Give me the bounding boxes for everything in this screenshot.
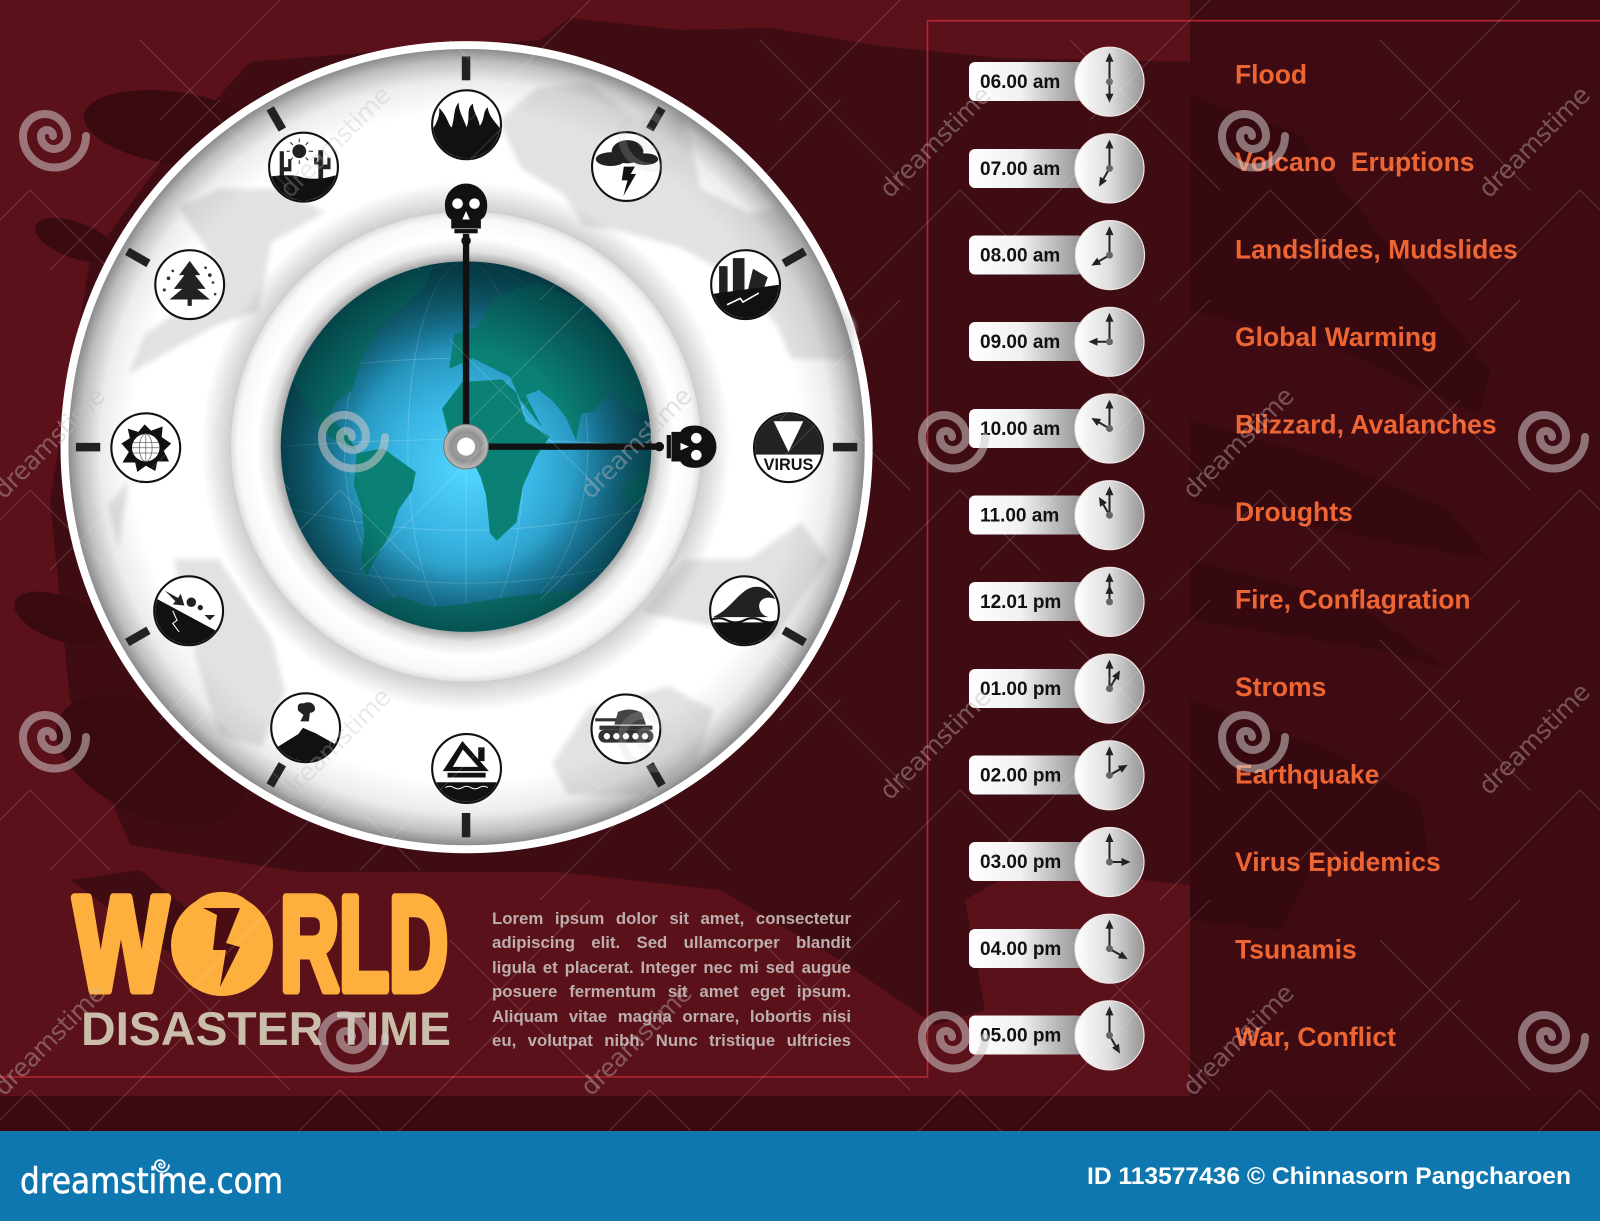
disaster name list: Blizzard, Avalanches	[1235, 410, 1497, 440]
schedule row 11.00 am	[969, 481, 1144, 550]
schedule row 07.00 am: 07.00 am	[980, 159, 1060, 180]
disaster name list: Earthquake	[1235, 760, 1379, 790]
schedule row 08.00 am	[969, 221, 1144, 290]
schedule row 12.01 pm: 12.01 pm	[980, 592, 1061, 613]
schedule row 11.00 am: 11.00 am	[980, 506, 1059, 526]
rim shading	[68, 49, 865, 845]
title: WORLD: RLD	[280, 870, 448, 1019]
schedule row 12.01 pm	[969, 567, 1144, 636]
icon: flood house	[432, 734, 501, 806]
text block: lorem ipsum paragraph: ligula et placerat. Integer nec mi sed augue	[492, 958, 851, 977]
disaster name list: Droughts	[1235, 497, 1353, 527]
title: WORLD: O	[180, 870, 264, 1019]
schedule row 10.00 am	[969, 394, 1144, 463]
schedule row 05.00 pm	[969, 1001, 1144, 1070]
disaster name list: Flood	[1235, 60, 1307, 90]
schedule row 07.00 am	[969, 134, 1144, 203]
icon: tsunami	[710, 576, 779, 649]
watermark overlay: dreamstime	[1177, 381, 1300, 504]
schedule row 08.00 am: 08.00 am	[980, 246, 1060, 266]
text block: lorem ipsum paragraph: Aliquam vitae magna ornare, lobortis nisi	[492, 1007, 851, 1026]
icon: storm	[592, 132, 661, 201]
icon: virus: VIRUS	[764, 456, 813, 474]
watermark overlay: dreamstime	[1177, 978, 1300, 1101]
watermark overlay: dreamstime	[1473, 80, 1596, 203]
schedule row 03.00 pm	[969, 828, 1144, 896]
footer bar: dreamstime.com	[20, 1161, 283, 1202]
text block: lorem ipsum paragraph	[492, 909, 851, 1050]
watermark overlay: dreamstime	[274, 682, 397, 805]
watermark overlay: dreamstime	[874, 682, 997, 805]
disaster name list: Stroms	[1235, 672, 1326, 702]
icon: virus	[754, 413, 823, 482]
clock dial	[61, 41, 873, 853]
icon: fire	[432, 90, 501, 162]
icon: tank	[592, 694, 660, 763]
hour ticks	[76, 56, 857, 837]
disaster name list: War, Conflict	[1235, 1022, 1396, 1052]
schedule row 01.00 pm: 01.00 pm	[980, 679, 1061, 700]
schedule row 06.00 am	[969, 47, 1144, 116]
icon: explosion globe	[111, 413, 180, 482]
schedule row 01.00 pm	[969, 654, 1144, 723]
skull hour hand	[445, 184, 487, 447]
text block: lorem ipsum paragraph: adipiscing elit. Sed ullamcorper blandit	[492, 933, 851, 952]
subtitle: DISASTER TIME: DISASTER TIME	[81, 1002, 451, 1055]
text block: lorem ipsum paragraph: posuere fermentum sit amet eget ipsum.	[492, 982, 851, 1001]
disaster name list	[1235, 60, 1518, 1052]
disaster name list: Landslides, Mudslides	[1235, 234, 1518, 264]
disaster name list: Virus Epidemics	[1235, 847, 1441, 877]
footer bar	[0, 1131, 1600, 1221]
title: WORLD: W	[74, 870, 168, 1019]
schedule row 02.00 pm: 02.00 pm	[980, 766, 1061, 786]
schedule row 05.00 pm: 05.00 pm	[980, 1026, 1061, 1046]
schedule row 03.00 pm: 03.00 pm	[980, 852, 1061, 873]
watermark overlay: dreamstime	[274, 80, 397, 203]
schedule row 06.00 am: 06.00 am	[980, 72, 1060, 93]
icon: landslide	[154, 576, 223, 648]
schedule row 02.00 pm	[969, 741, 1144, 810]
schedule row 09.00 am: 09.00 am	[980, 332, 1060, 353]
world map on face	[108, 83, 854, 795]
icon: desert	[269, 133, 338, 204]
clock hub	[444, 424, 488, 469]
watermark overlay: dreamstime	[575, 978, 698, 1101]
schedule row 10.00 am: 10.00 am	[980, 419, 1060, 440]
watermark overlay: dreamstime	[1473, 677, 1596, 800]
watermark overlay: dreamstime	[575, 381, 698, 504]
disaster name list: Volcano Eruptions	[1235, 147, 1474, 177]
inner ring	[201, 182, 731, 711]
disaster name list: Tsunamis	[1235, 934, 1357, 964]
footer bar: ID 113577436 © Chinnasorn Pangcharoen	[1087, 1163, 1571, 1190]
icon: volcano	[271, 693, 340, 765]
schedule row 04.00 pm	[969, 914, 1144, 983]
icon: earthquake	[711, 250, 780, 322]
title: WORLD	[74, 870, 448, 1019]
outer clock face	[61, 41, 873, 853]
schedule row 09.00 am	[969, 307, 1144, 376]
text block: lorem ipsum paragraph: eu, volutpat nibh. Nunc tristique ultricies	[492, 1031, 851, 1050]
schedule row 04.00 pm: 04.00 pm	[980, 939, 1061, 960]
globe	[272, 261, 656, 639]
disaster name list: Global Warming	[1235, 322, 1437, 352]
disaster name list: Fire, Conflagration	[1235, 584, 1471, 614]
watermark overlay: dreamstime	[874, 80, 997, 203]
text block: lorem ipsum paragraph: Lorem ipsum dolor sit amet, consectetur	[492, 909, 851, 928]
skull minute hand	[466, 425, 716, 468]
icon: pine tree	[155, 250, 224, 319]
